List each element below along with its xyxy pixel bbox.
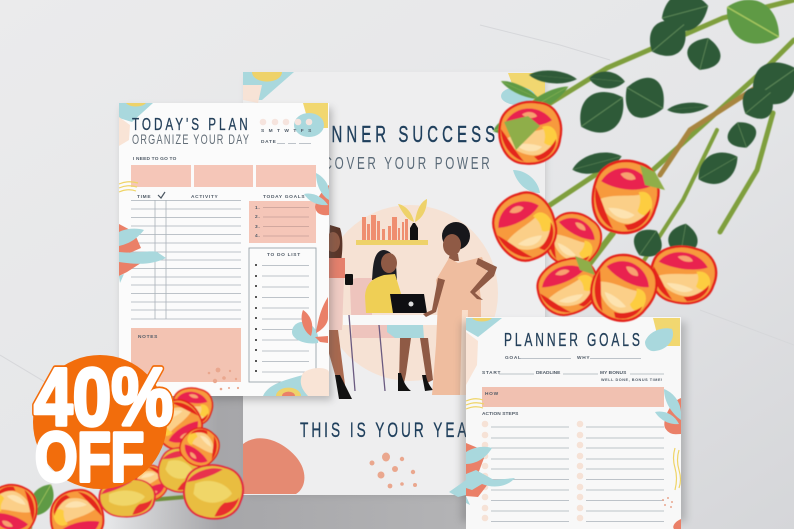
goal fields: START [482,370,501,376]
today goals: 1. [255,205,260,211]
notes box [131,328,241,390]
icon: teal leaf [513,170,540,193]
decoration: dots and coral shape [662,497,681,529]
errand boxes [131,165,316,187]
decoration: right leaves [304,173,329,215]
illustration: three women at a desk [322,199,498,399]
today goals: 4. [255,233,260,239]
goal fields: DEADLINE [536,370,561,376]
decoration: left leaves [449,443,515,505]
panel: today's plan page [119,103,332,400]
today goals: 3. [255,224,260,230]
subheading: organize your day: ORGANIZE YOUR DAY [132,131,249,148]
badge: 40% off: 40% [34,352,173,443]
rose blooms [484,102,720,332]
to do list: TO DO LIST [267,252,301,258]
badge: 40% off: OFF [35,418,144,496]
weekday selector: DATE [261,139,277,145]
weekday selector: S M T W T F S [261,128,312,134]
leaves [491,0,794,264]
decoration: yellow waves right [674,448,680,490]
top-right rose bouquet [484,0,794,332]
subheading: discover your power: DISCOVER YOUR POWER [296,154,490,174]
how box: HOW [485,391,499,397]
decoration: bottom shapes [263,368,329,396]
decoration: yellow waves [119,182,138,192]
goal fields: GOAL [505,355,522,361]
heading: planner success: PLANNER SUCCESS [291,122,495,148]
goal fields: WELL DONE, BONUS TIME! [601,378,663,382]
heading: planner goals: PLANNER GOALS [504,331,640,351]
today goals [249,194,316,243]
decoration: peach dots [370,452,417,488]
decoration: yellow waves left [466,399,484,409]
decoration: coral blob [243,438,304,494]
schedule table: TIME [137,194,151,200]
grey surface under the pages [110,396,470,529]
panel: planner success page [243,72,545,495]
today goals: TODAY GOALS [263,194,305,200]
stems [523,0,794,263]
text: this is your year: THIS IS YOUR YEAR [300,418,479,442]
goal fields: WHY [577,355,590,361]
badge: 40% off: 40% [34,352,173,443]
how box [482,387,664,407]
sepals [504,116,665,275]
badge: 40% off [33,352,173,496]
notes box: NOTES [138,334,158,340]
panel: planner goals page [449,317,686,529]
action steps: ACTION STEPS [482,411,519,417]
goal fields [482,355,664,382]
heading: today's plan: TODAY'S PLAN [132,115,248,135]
today goals: 2. [255,214,260,220]
schedule table: ACTIVITY [191,194,219,200]
to do list [249,248,316,382]
bottom-left rose bouquet [0,385,247,529]
decoration: lower right leaves [292,297,328,343]
label: i need to go to: I NEED TO GO TO [133,156,177,162]
decoration: left leaves [119,224,166,283]
decoration: right leaves [655,389,681,434]
goal fields: MY BONUS [600,370,627,376]
weekday selector [260,119,312,145]
action steps [482,411,664,522]
schedule table [131,192,241,319]
